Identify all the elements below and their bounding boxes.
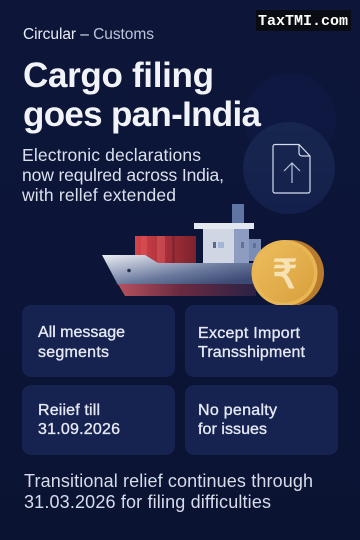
title: goes pan-India	[23, 95, 262, 134]
card: relief till	[22, 385, 175, 455]
card: all message segments: All message	[38, 324, 125, 341]
card: except import transshipment	[185, 305, 338, 377]
porthole	[127, 269, 131, 272]
card: no penalty: No penalty	[198, 402, 277, 419]
card: all message segments	[22, 305, 175, 377]
card: all message segments: segments	[38, 344, 109, 361]
icon: rupee coin	[252, 240, 324, 306]
card: no penalty: for issues	[198, 421, 267, 438]
footer note	[24, 471, 313, 512]
subtitle: Electronic declarations	[22, 145, 201, 165]
card: except import transshipment: Except Import	[198, 325, 301, 342]
footer note: Transitional relief continues through	[24, 471, 313, 491]
card: relief till: 31.09.2026	[38, 421, 120, 438]
subtitle: now requlred across India,	[22, 165, 224, 185]
ship hull	[102, 255, 256, 285]
card: relief till: Reiief till	[38, 402, 100, 419]
title	[23, 56, 262, 134]
card: no penalty	[185, 385, 338, 455]
eyebrow: Circular – Customs	[23, 26, 154, 43]
footer note: 31.03.2026 for filing difficulties	[24, 492, 271, 512]
title: Cargo filing	[23, 56, 214, 95]
ship containers	[135, 236, 196, 263]
illustration: cargo ship	[102, 204, 261, 296]
icon: document upload	[243, 73, 336, 214]
ship keel	[118, 284, 256, 296]
watermark badge: TaxTMI.com	[258, 13, 348, 30]
subtitle	[21, 145, 224, 205]
subtitle: with rellef extended	[21, 185, 176, 205]
ship bridge	[194, 223, 261, 263]
ship funnel	[232, 204, 244, 224]
icon: rupee coin: ₹	[272, 252, 298, 298]
card: except import transshipment: Transshipment	[198, 344, 306, 361]
